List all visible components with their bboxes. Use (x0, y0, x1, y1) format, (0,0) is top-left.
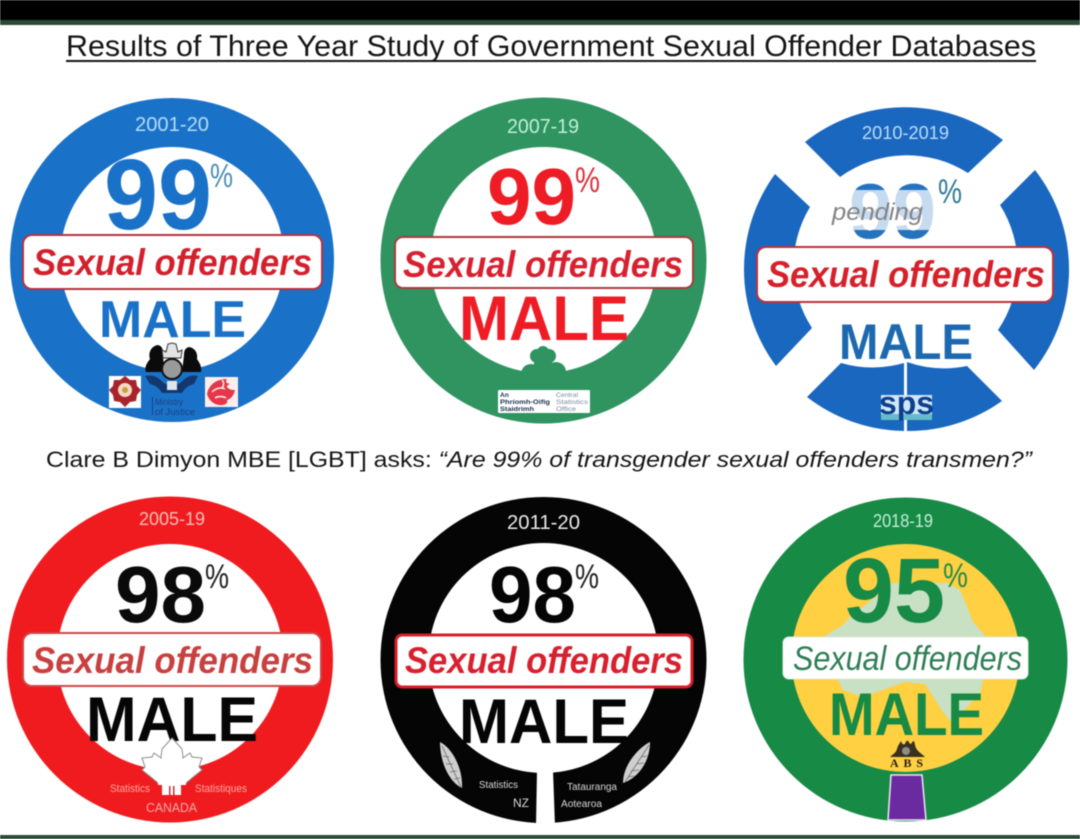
ministry of justice caption: of Justice (155, 407, 195, 418)
percentage 99: 99 (487, 152, 576, 241)
MALE: MALE (99, 291, 246, 349)
statistics canada caption (110, 783, 247, 815)
icon: ABS crest: ABS (890, 756, 923, 770)
icon: ABS crest (890, 741, 925, 770)
date range: 2005-19 (139, 509, 205, 529)
date range: 2001-20 (135, 114, 209, 136)
green ring with yellow centre (744, 498, 1068, 822)
statistics canada caption: Statistics (110, 783, 150, 795)
MALE: MALE (86, 685, 258, 755)
statistics canada caption: CANADA (146, 800, 197, 815)
green ring (380, 98, 706, 424)
panel: Statistics NZ 98% (380, 497, 706, 826)
title: Results of Three Year Study of Government Sexual Offender Databases (66, 30, 1036, 63)
panel: Statistics Canada 98% (7, 496, 333, 822)
percentage 99: % (210, 157, 233, 194)
quote line: Clare B Dimyon MBE [LGBT] asks: “Are 99% of transgender sexual offenders transmen?” (46, 447, 1034, 472)
sexual offenders label: Sexual offenders (405, 640, 683, 681)
icon: royal crest (145, 343, 201, 393)
red ring (7, 496, 333, 822)
black ring (380, 497, 706, 826)
icon: left fern feather (440, 742, 462, 788)
percentage 99 pending: 99 (849, 167, 936, 255)
central statistics office caption: Statistics (556, 399, 589, 406)
icon: right fern feather (623, 742, 650, 783)
statistics nz caption: NZ (513, 796, 529, 810)
sexual offenders label: Sexual offenders (32, 640, 313, 681)
bottom bar (0, 835, 1080, 839)
percentage 98: % (205, 558, 229, 596)
icon: red rose (109, 376, 141, 408)
blue ring (10, 98, 334, 422)
panel: Central Statistics Office 99% (380, 98, 706, 424)
map of Australia (823, 583, 987, 723)
central statistics office caption: Staidrimh (500, 406, 534, 413)
central statistics office caption: An (500, 392, 509, 399)
percentage 98: % (575, 558, 599, 596)
segmented blue ring (744, 107, 1069, 431)
sexual offenders label: Sexual offenders (767, 254, 1045, 295)
percentage 99 pending: % (938, 173, 962, 211)
top bar (0, 0, 1080, 25)
central statistics office caption (498, 390, 590, 413)
percentage 99 pending: 99 (849, 167, 936, 255)
statistics nz caption: Tatauranga (567, 782, 617, 793)
MALE: MALE (829, 681, 984, 748)
percentage 99 pending: pending (831, 199, 924, 226)
sexual offenders label: Sexual offenders (403, 244, 683, 285)
panel: Scottish Prison Service pending (744, 107, 1069, 431)
percentage 99 pending (830, 178, 962, 240)
percentage 95: % (943, 557, 968, 595)
MALE: MALE (459, 284, 629, 354)
percentage 95: 95 (843, 540, 945, 642)
ministry of justice caption: Ministry (155, 397, 183, 408)
icon: sps logo: sps (879, 385, 934, 421)
sexual offenders label: Sexual offenders (793, 640, 1022, 678)
statistics nz caption: Aotearoa (561, 799, 602, 810)
MALE: MALE (839, 314, 973, 370)
icon: maple leaf (142, 738, 202, 795)
MALE: MALE (459, 687, 629, 757)
panel: Ministry of Justice 99% (10, 98, 334, 422)
date range: 2007-19 (507, 116, 579, 138)
percentage 98: 98 (489, 550, 576, 639)
panel: Australian Bureau of Statistics 95% (744, 498, 1068, 822)
icon: red dragon (205, 377, 238, 407)
percentage 98: 98 (115, 550, 206, 639)
date range: 2010-2019 (862, 123, 949, 143)
percentage 99: 99 (104, 139, 212, 251)
statistics nz caption (479, 780, 617, 810)
icon: shamrock (521, 346, 566, 384)
percentage 99: % (575, 161, 600, 200)
date range: 2011-20 (507, 512, 580, 534)
central statistics office caption: Office (556, 406, 576, 413)
statistics canada caption: Statistiques (195, 783, 247, 795)
central statistics office caption: Phríomh-Oifig (500, 399, 550, 406)
purple tab (888, 775, 926, 820)
ministry of justice caption (152, 397, 195, 418)
central statistics office caption: Central (556, 392, 579, 399)
date range: 2018-19 (873, 511, 933, 531)
sexual offenders label: Sexual offenders (33, 242, 312, 283)
statistics nz caption: Statistics (479, 780, 518, 791)
